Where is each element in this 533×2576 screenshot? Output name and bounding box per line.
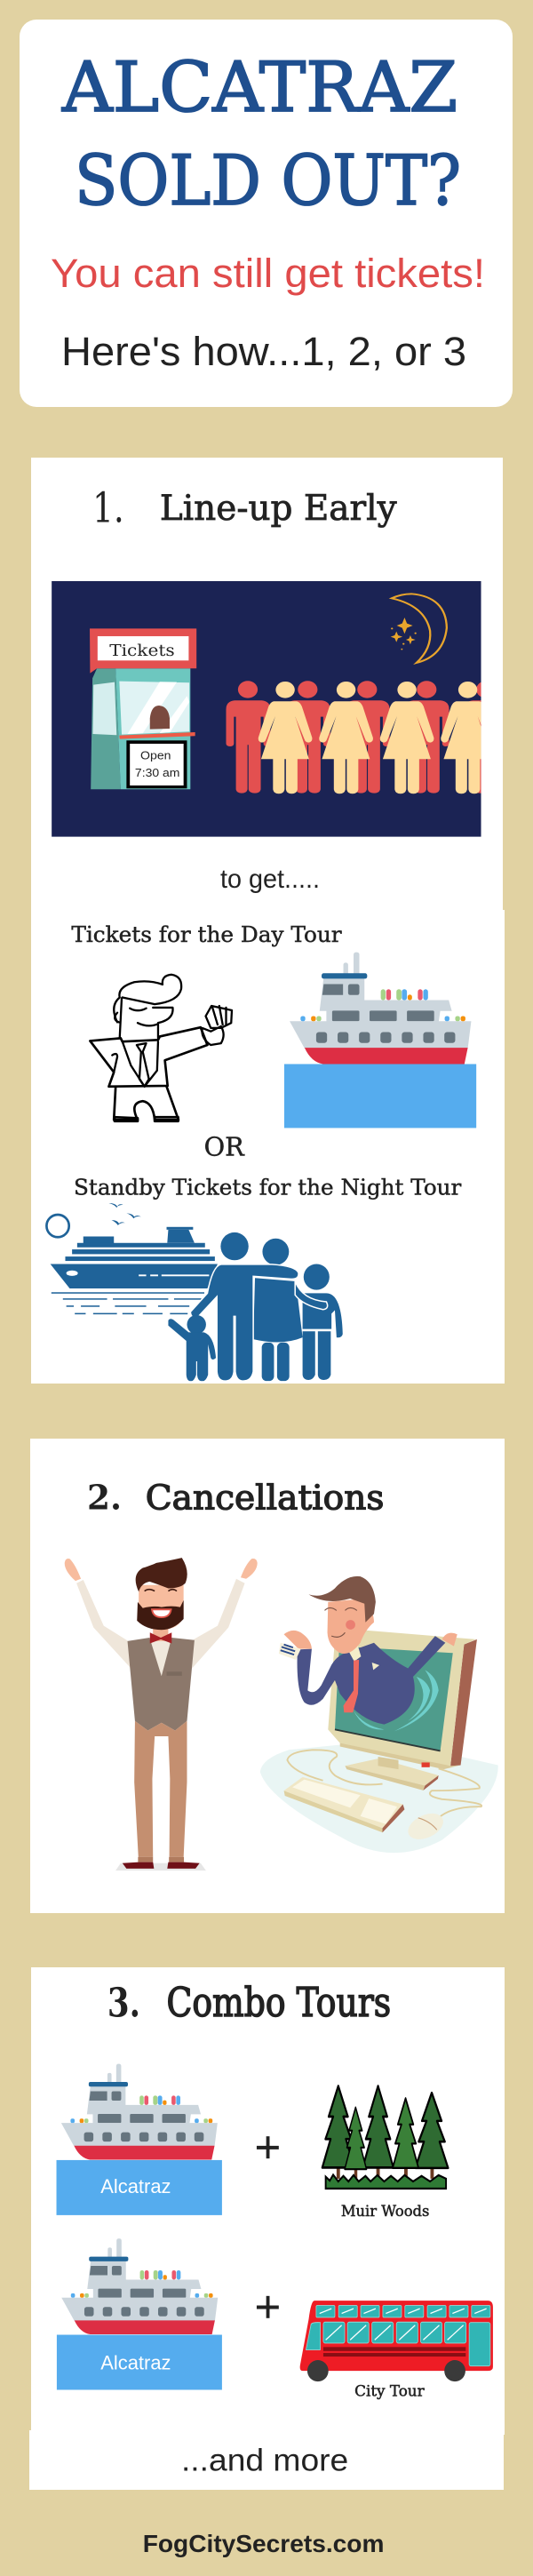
panel: 2 cancellations [30, 1439, 505, 1913]
subtitle: You can still get tickets! [51, 251, 485, 296]
heading: 1. Line-up Early: Line-up Early [160, 488, 397, 528]
woman arm [295, 1281, 328, 1310]
child [168, 1315, 216, 1381]
icon: ferry on blue water [284, 953, 476, 1128]
illustration: man reaching out of computer [260, 1576, 498, 1853]
illustration: night ticket line [52, 581, 509, 837]
heading: 2. Cancellations: Cancellations [146, 1479, 384, 1519]
text: Tickets for the Day Tour: Tickets for the Day Tour [71, 921, 342, 947]
icon: plus, top [257, 2136, 279, 2158]
icon: ferry labelled Alcatraz, top [57, 2064, 222, 2215]
footer: website: FogCitySecrets.com [143, 2531, 384, 2557]
woman [253, 1239, 303, 1381]
heading: 3. Combo Tours: 3. [107, 1980, 140, 2026]
father [190, 1232, 298, 1381]
icon: ticket booth [90, 628, 196, 789]
icon: ferry labelled Alcatraz, top: Alcatraz [100, 2176, 171, 2197]
icon: ticket booth: Open [140, 749, 171, 762]
icon: line of people [226, 681, 509, 794]
text: Standby Tickets for the Night Tour: Standby Tickets for the Night Tour [74, 1174, 462, 1200]
icon: ticket booth: Tickets [109, 641, 175, 660]
panel: title card [20, 20, 513, 407]
heading: 2. Cancellations: 2. [87, 1479, 122, 1519]
icon: ferry labelled Alcatraz, bottom [57, 2238, 222, 2389]
heading: 3. Combo Tours: Combo Tours [167, 1979, 391, 2026]
title line: SOLD OUT?: SOLD OUT? [75, 141, 461, 221]
icon: moon and stars [391, 594, 447, 663]
intro line: Here's how...1, 2, or 3 [61, 329, 466, 374]
text: and more: ...and more [181, 2443, 348, 2477]
text: OR: OR [204, 1131, 245, 1161]
label: Muir Woods: Muir Woods [341, 2202, 429, 2221]
text: to get: to get..... [220, 865, 320, 894]
icon: red double-decker bus [300, 2301, 493, 2381]
heading: 1. Line-up Early: 1. [92, 483, 124, 531]
title line: ALCATRAZ: ALCATRAZ [61, 48, 457, 128]
icon: plus, bottom [257, 2296, 279, 2318]
panel: 3 combo tours [29, 1967, 505, 2490]
illustration: happy man with raised arms [65, 1558, 258, 1870]
panel: 1 line-up early [31, 458, 509, 1384]
icon: man holding money [90, 975, 232, 1121]
boy [303, 1264, 343, 1380]
icon: Muir Woods trees [322, 2086, 448, 2189]
heading: 1. Line-up Early [92, 483, 397, 531]
icon: ticket booth: 7:30 am [135, 767, 179, 779]
label: City Tour: City Tour [354, 2382, 425, 2400]
icon: cruise ship with family [46, 1203, 343, 1381]
icon: ferry labelled Alcatraz, bottom: Alcatraz [100, 2352, 171, 2374]
